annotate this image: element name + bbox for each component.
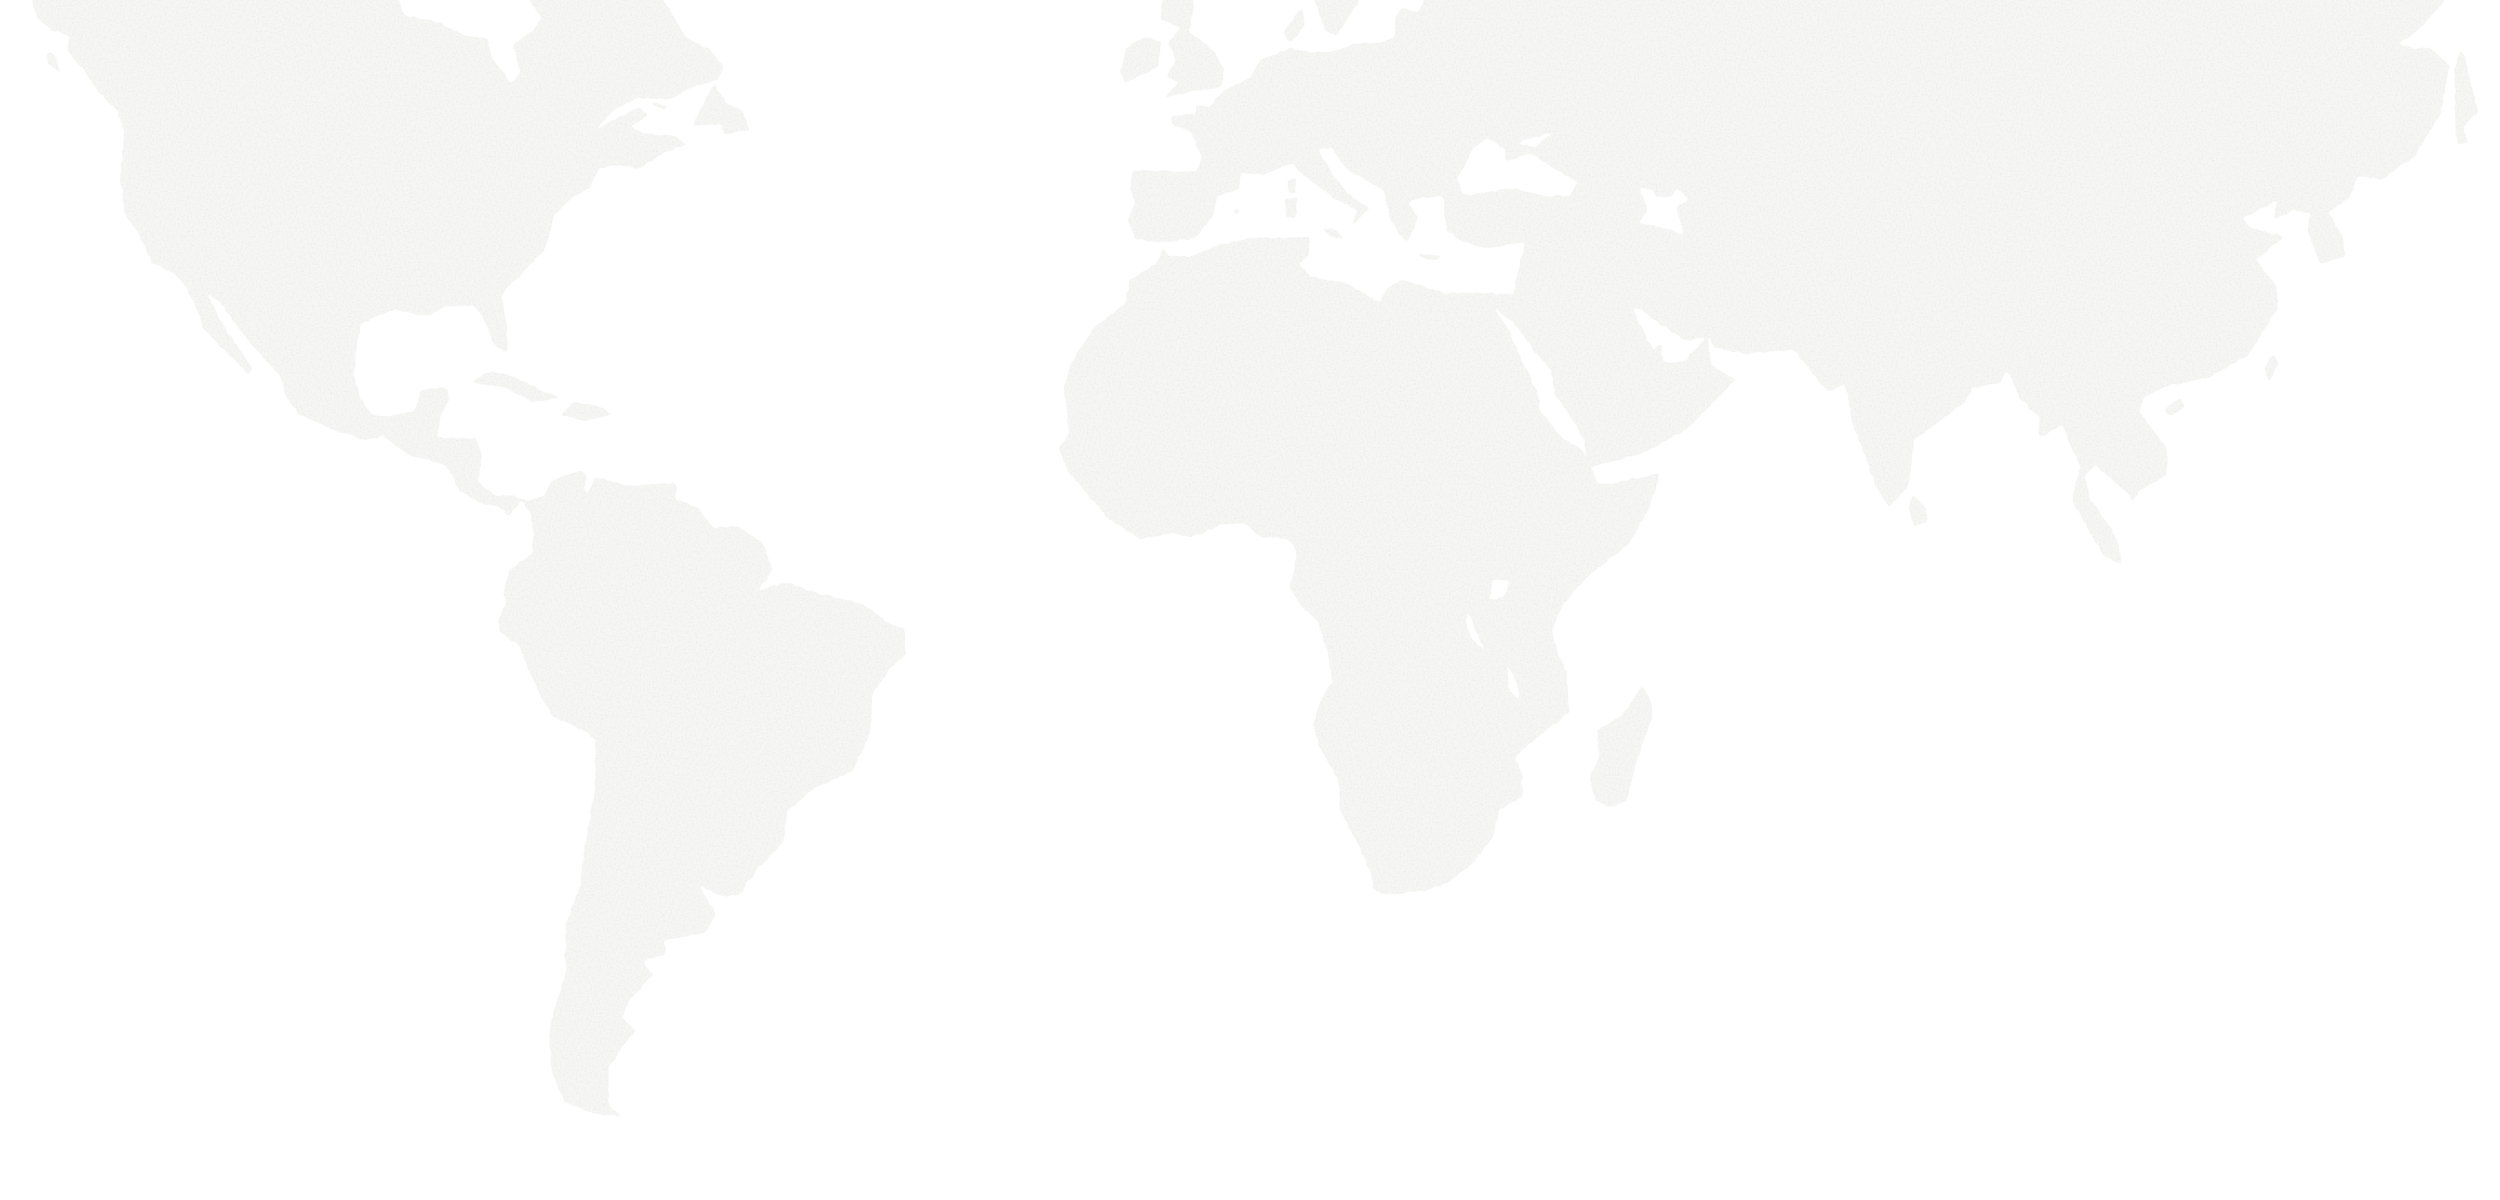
peninsula: Denmark: [1283, 8, 1306, 43]
island: Prince Edward: [647, 101, 670, 110]
continent: Europe, Asia and Africa: [1059, 0, 2478, 895]
island: Great Britain: [1161, 0, 1224, 98]
island: Sardinia: [1285, 198, 1297, 218]
island: Ireland: [1121, 37, 1161, 83]
island: Crete: [1418, 253, 1441, 260]
island: Hispaniola: [561, 402, 612, 421]
peninsula: Norway and Sweden: [1314, 0, 1360, 35]
island: Cuba: [469, 371, 561, 402]
island: Vancouver coast: [46, 52, 61, 73]
island: Hainan: [2164, 398, 2185, 417]
island: Balearics: [1232, 208, 1240, 215]
island: Corsica: [1288, 179, 1296, 193]
island: Madagascar: [1590, 685, 1652, 807]
island: Orkney: [1269, 0, 1285, 3]
island: Sicily: [1321, 228, 1344, 240]
continent: the Americas: [25, 0, 905, 1117]
island: Sakhalin: [2455, 50, 2478, 145]
island: Taiwan: [2264, 354, 2279, 383]
island: Sri Lanka: [1909, 494, 1927, 526]
island: Newfoundland: [692, 84, 749, 134]
